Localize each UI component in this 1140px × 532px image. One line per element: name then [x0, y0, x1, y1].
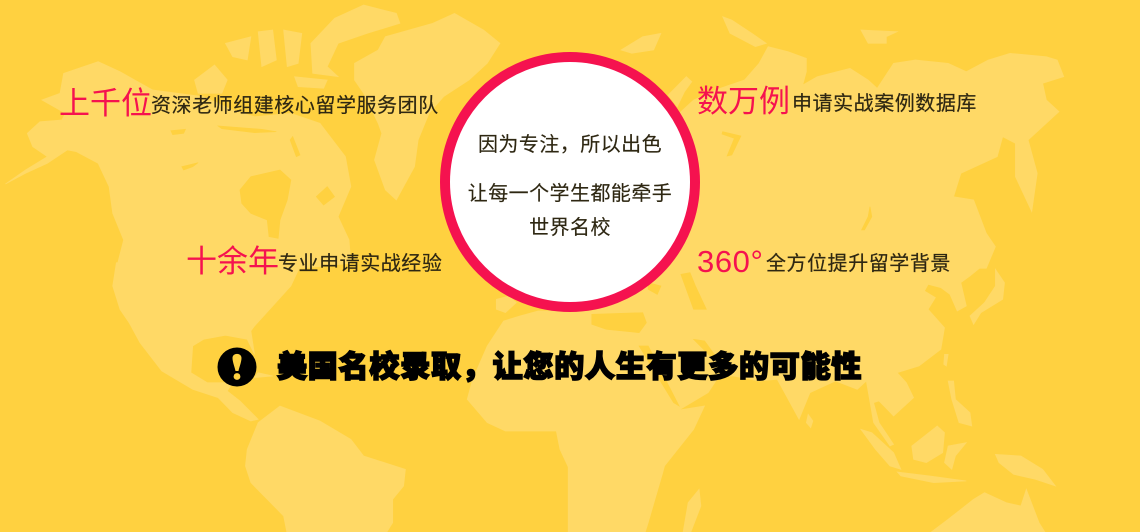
stat: top right: 数万例	[697, 84, 790, 119]
stat: bottom right: 360°	[697, 244, 764, 279]
circle text: slogan: 因为专注，所以出色	[478, 134, 662, 156]
stat: top left	[59, 86, 439, 121]
stat: bottom left: 十余年	[186, 244, 279, 279]
circle text: slogan: 世界名校	[529, 217, 611, 239]
icon: exclamation	[218, 348, 256, 386]
stat: bottom left	[186, 244, 442, 279]
circle text: slogan	[468, 134, 672, 239]
circle text: slogan: 让每一个学生都能牵手	[468, 183, 672, 205]
stat: top left: 资深老师组建核心留学服务团队	[151, 95, 439, 117]
circle ring	[440, 52, 700, 312]
stat: bottom right	[697, 244, 951, 279]
stat: top right	[697, 84, 977, 119]
headline: 美国名校录取，让您的人生有更多的可能性	[277, 351, 862, 384]
central circle with slogan	[440, 52, 700, 312]
stat: top left: 上千位	[59, 86, 152, 121]
stat: top right: 申请实战案例数据库	[792, 93, 977, 115]
stat: bottom right: 全方位提升留学背景	[766, 253, 951, 275]
stat: bottom left: 专业申请实战经验	[278, 253, 442, 275]
